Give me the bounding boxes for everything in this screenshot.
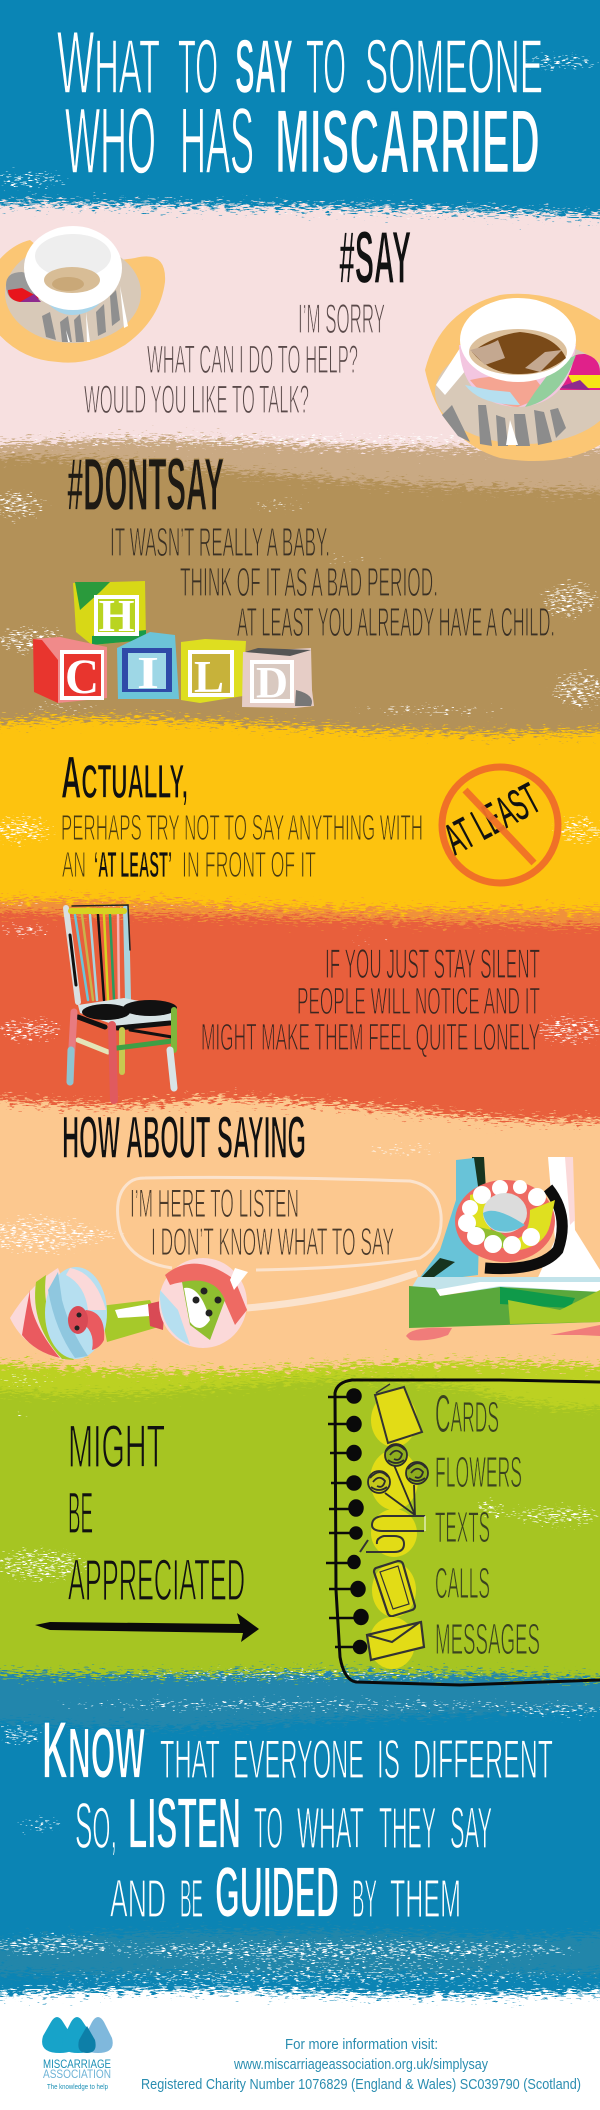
text: might be appreciated: MIGHT [68, 1413, 165, 1480]
text: might be appreciated: BE [68, 1481, 93, 1546]
block I [117, 632, 179, 699]
speech bubble [118, 1177, 441, 1270]
closing message: THEY [379, 1796, 436, 1861]
icon: text bubbles [360, 1509, 425, 1557]
text: at least advice: IN FRONT OF IT [182, 844, 316, 885]
text: list of items: TEXTS [435, 1503, 490, 1552]
icon: telephone handset [10, 1258, 248, 1360]
block C [33, 637, 107, 704]
title: HAS [180, 88, 254, 193]
closing message [42, 1705, 553, 1933]
logo mark [42, 2017, 113, 2053]
closing message: BE [180, 1869, 203, 1929]
block H: H [98, 590, 135, 641]
logo name: MISCARRIAGE [43, 2059, 111, 2071]
arrow [35, 1613, 259, 1642]
logo: Miscarriage Association [42, 2017, 113, 2091]
closing message: WHAT [297, 1796, 364, 1861]
text: I’M SORRY [298, 295, 385, 342]
title: TO [306, 24, 346, 110]
logo tagline: The knowledge to help [47, 2082, 108, 2091]
block H [73, 581, 146, 645]
text: list of items [435, 1384, 540, 1664]
title: TO [178, 24, 218, 110]
icon: empty painted chair [66, 905, 177, 1100]
text: at least advice [61, 807, 423, 885]
text: at least advice: ‘AT LEAST’ [94, 844, 172, 885]
footer information [141, 2037, 581, 2093]
icon: right teacup on saucer [425, 294, 600, 461]
text: say suggestions [84, 295, 385, 422]
block C: C [65, 648, 99, 704]
block I: I [137, 647, 159, 698]
logo: Miscarriage Association: ASSOCIATION [43, 2069, 111, 2081]
block L: L [194, 651, 224, 702]
icon: child letter blocks [33, 581, 314, 708]
title: SAY [235, 24, 293, 110]
text: #SAY [339, 216, 411, 299]
text: things not to say [110, 519, 555, 645]
heading: Actually: ACTUALLY, [61, 744, 188, 811]
text: might be appreciated [68, 1413, 245, 1613]
closing message: THAT [160, 1728, 220, 1790]
text: list of items: CARDS [435, 1384, 499, 1444]
telephone cord [247, 1273, 417, 1308]
closing message: SO, [75, 1789, 117, 1862]
notebook [326, 1380, 600, 1685]
closing message: AND [110, 1869, 166, 1929]
closing message: GUIDED [215, 1853, 339, 1933]
icon: no at least sign [437, 767, 558, 883]
block D: D [256, 658, 288, 707]
closing message: EVERYONE [233, 1728, 364, 1790]
closing message: TO [254, 1796, 283, 1861]
footer information: For more information visit: [285, 2037, 438, 2053]
icon: card [371, 1384, 422, 1447]
icon: envelope [367, 1617, 424, 1669]
closing message: BY [352, 1869, 377, 1929]
closing message: SAY [450, 1796, 492, 1861]
text: #DONTSAY [67, 443, 224, 526]
icon: phone [372, 1561, 416, 1617]
icon: left teacup on saucer [0, 226, 165, 363]
title: WHO [65, 88, 156, 193]
block D [242, 648, 314, 708]
closing message: IS [377, 1728, 400, 1790]
text: list of items: CALLS [435, 1559, 490, 1608]
notebook outline [335, 1380, 600, 1685]
text: bubble phrases [130, 1182, 394, 1264]
title [57, 12, 543, 193]
text: bubble phrases: I’M HERE TO LISTEN [130, 1182, 299, 1226]
closing message: THEM [390, 1869, 461, 1929]
icon: flowers [368, 1444, 428, 1515]
block L [181, 639, 246, 703]
icon: rotary telephone [406, 1157, 600, 1340]
footer information: www.miscarriageassociation.org.uk/simplysay [233, 2057, 489, 2073]
closing message: LISTEN [128, 1784, 241, 1864]
notebook rings [326, 1390, 368, 1653]
title: WHAT [57, 12, 160, 112]
closing message: KNOW [42, 1705, 145, 1796]
text: at least advice: AN [62, 844, 86, 885]
text: staying silent [201, 940, 540, 1059]
text: APPRECIATED [68, 1548, 245, 1613]
